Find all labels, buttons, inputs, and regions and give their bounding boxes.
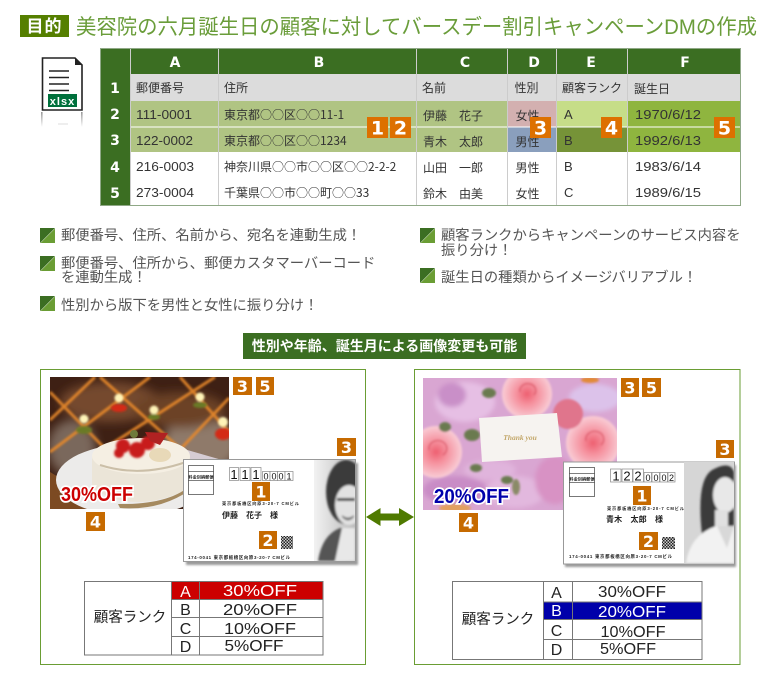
- badges: card: 1: [255, 482, 267, 502]
- badges: image: 3: [624, 378, 636, 398]
- arrow: double headed: [366, 508, 414, 526]
- bullet list right: 顧客ランクからキャンペーンのサービス内容を: [441, 227, 741, 244]
- row numbers: 5: [110, 186, 120, 202]
- rank table: A: [551, 585, 562, 602]
- rank table: B: [180, 602, 191, 619]
- postal code: 0: [263, 472, 269, 482]
- data rows: 111-0001: [136, 107, 192, 122]
- column headers: E: [586, 55, 596, 71]
- rank table: 5%OFF: [600, 641, 656, 658]
- data rows: 122-0002: [136, 133, 193, 148]
- address: 東京都板橋区向原3-20-7 CMビル: [222, 500, 300, 507]
- panel: left example: [40, 370, 366, 664]
- header row: 誕生日: [634, 80, 670, 97]
- column headers: D: [528, 55, 540, 71]
- stamp box: [188, 466, 214, 494]
- spreadsheet table: [100, 48, 741, 206]
- rank table: B: [551, 603, 562, 620]
- postal code: 0: [661, 473, 667, 483]
- sender: 174-0041 東京都板橋区向原3-20-7 CMビル: [188, 554, 291, 561]
- header row: 名前: [422, 79, 446, 96]
- badges: card: 2: [643, 532, 654, 551]
- rank table: 顧客ランク: [462, 611, 534, 628]
- header row: 顧客ランク: [562, 79, 622, 96]
- header row: 性別: [514, 79, 539, 96]
- rank table: D: [551, 642, 562, 659]
- postal code: 1: [241, 467, 249, 482]
- icon: xlsx file: xlsx: [50, 96, 75, 108]
- rank table: D: [180, 639, 191, 656]
- QR code: [662, 537, 675, 549]
- bullet list left: 性別から版下を男性と女性に振り分け！: [61, 297, 318, 314]
- portrait: [314, 460, 355, 561]
- panel: right example: [410, 369, 740, 664]
- data rows: 千葉県○○市○○町○○33: [224, 184, 369, 201]
- data rows: B: [564, 133, 573, 148]
- data rows: 鈴木 由美: [423, 185, 483, 202]
- title tag: [20, 15, 69, 37]
- title: 美容院の六月誕生日の顧客に対してバースデー割引キャンペーンDMの作成: [76, 16, 757, 39]
- badges on table: 2: [394, 118, 407, 140]
- rank table: 30%OFF: [223, 583, 297, 600]
- data rows: 山田 一郎: [423, 159, 483, 176]
- column headers: B: [314, 55, 324, 71]
- QR code: [281, 536, 293, 549]
- cake photo: [50, 377, 229, 509]
- rank table: A: [180, 584, 191, 601]
- postal code: [230, 467, 293, 482]
- badges on table: 1: [371, 118, 384, 140]
- portrait: [684, 462, 737, 563]
- data rows: A: [564, 107, 573, 122]
- title tag: 目的: [26, 17, 62, 36]
- bullet list right: [420, 227, 741, 286]
- discount label: 30%OFF: [61, 484, 133, 506]
- postal code: [610, 468, 675, 484]
- row numbers: [110, 81, 120, 202]
- badges: image: [459, 378, 734, 532]
- discount label: 20%OFF: [434, 486, 509, 508]
- postal code: 0: [278, 472, 284, 482]
- rank table: C: [180, 621, 191, 638]
- icon: xlsx file: [41, 58, 83, 127]
- badges on table: [367, 117, 735, 140]
- column headers: F: [680, 55, 690, 71]
- bullet list left: [40, 227, 375, 314]
- data rows: 青木 太郎: [423, 133, 483, 150]
- row numbers: 2: [110, 107, 120, 123]
- badges: image: 4: [463, 514, 474, 532]
- data rows: 女性: [516, 185, 540, 202]
- address: 東京都板橋区向原3-20-7 CMビル: [607, 505, 685, 512]
- data rows: 東京都○○区○○11-1: [224, 106, 344, 123]
- postal code: 0: [653, 473, 659, 483]
- badges: card: [633, 486, 658, 551]
- bullet list right: 誕生日の種類からイメージバリアブル！: [441, 268, 697, 286]
- row numbers: 1: [110, 81, 120, 97]
- header row: 郵便番号: [136, 79, 184, 96]
- header row: [136, 79, 670, 97]
- recipient: 伊藤 花子 様: [222, 510, 278, 520]
- data rows: 男性: [516, 133, 540, 150]
- column headers: A: [170, 55, 181, 71]
- postal code: 0: [645, 473, 651, 483]
- data rows: 1983/6/14: [635, 159, 701, 174]
- data rows: B: [564, 159, 573, 174]
- rank table: [84, 581, 323, 656]
- data rows: 東京都○○区○○1234: [224, 132, 347, 149]
- rank table: 10%OFF: [224, 621, 296, 638]
- card message: Thank you: [503, 433, 537, 442]
- badges: image: 5: [646, 378, 657, 398]
- data rows: 男性: [516, 159, 540, 176]
- stamp box: 料金別納郵便: [569, 476, 595, 482]
- postal code: 2: [634, 468, 642, 484]
- badges: card: 1: [636, 486, 648, 506]
- badges: image: 5: [259, 377, 271, 396]
- subheading banner: [243, 333, 526, 359]
- badges: card: 2: [262, 531, 274, 550]
- postal code: 1: [612, 468, 620, 484]
- rank table: [452, 581, 702, 660]
- data rows: 1970/6/12: [635, 107, 701, 122]
- bullet list left: 郵便番号、住所から、郵便カスタマーバーコード: [61, 255, 375, 272]
- rank table: 30%OFF: [598, 584, 666, 601]
- bullet list left: を連動生成！: [61, 269, 147, 286]
- data rows: 伊藤 花子: [423, 107, 483, 124]
- stamp box: [569, 468, 595, 496]
- row numbers: 3: [110, 133, 120, 149]
- data rows: 216-0003: [136, 159, 194, 174]
- recipient: 青木 太郎 様: [606, 514, 663, 524]
- postal code: 1: [252, 467, 260, 482]
- badges on table: 3: [534, 118, 547, 140]
- badges on table: 4: [605, 118, 618, 140]
- badges: image: 3: [719, 440, 731, 459]
- stamp box: 料金別納郵便: [188, 474, 214, 480]
- rank table: C: [551, 623, 562, 640]
- rank table: 顧客ランク: [94, 609, 166, 626]
- sender: 174-0041 東京都板橋区向原3-20-7 CMビル: [569, 553, 673, 560]
- postal code: 1: [230, 467, 238, 482]
- column headers: C: [460, 55, 470, 71]
- rank table: 10%OFF: [600, 624, 666, 641]
- badges: card: [252, 482, 277, 550]
- flower photo: [423, 378, 617, 510]
- subheading banner: 性別や年齢、誕生月による画像変更も可能: [252, 338, 517, 354]
- badges: image: 4: [90, 512, 101, 532]
- postal code: 2: [669, 473, 674, 483]
- data rows: 1989/6/15: [635, 185, 701, 200]
- data rows: 女性: [516, 107, 540, 124]
- data rows: [136, 106, 701, 202]
- postal code: 2: [623, 468, 631, 484]
- postcard: [564, 462, 737, 567]
- row numbers: 4: [110, 160, 120, 176]
- data rows: 1992/6/13: [635, 133, 701, 148]
- postcard: [184, 460, 366, 565]
- postal code: 0: [271, 472, 277, 482]
- badges on table: 5: [718, 118, 731, 140]
- rank table: 20%OFF: [223, 602, 297, 619]
- badges: image: 3: [237, 377, 248, 396]
- bullet list left: 郵便番号、住所、名前から、宛名を連動生成！: [61, 227, 361, 244]
- bullet list right: 振り分け！: [441, 242, 512, 259]
- badges: image: [86, 377, 356, 532]
- data rows: 273-0004: [136, 185, 194, 200]
- postal code: 1: [286, 472, 292, 482]
- rank table: 20%OFF: [598, 604, 666, 621]
- column headers: [170, 55, 690, 71]
- rank table: 5%OFF: [224, 638, 284, 655]
- data rows: C: [564, 185, 573, 200]
- data rows: 神奈川県○○市○○区○○2-2-2: [224, 158, 397, 175]
- badges: image: 3: [341, 438, 352, 457]
- header row: 住所: [224, 79, 248, 96]
